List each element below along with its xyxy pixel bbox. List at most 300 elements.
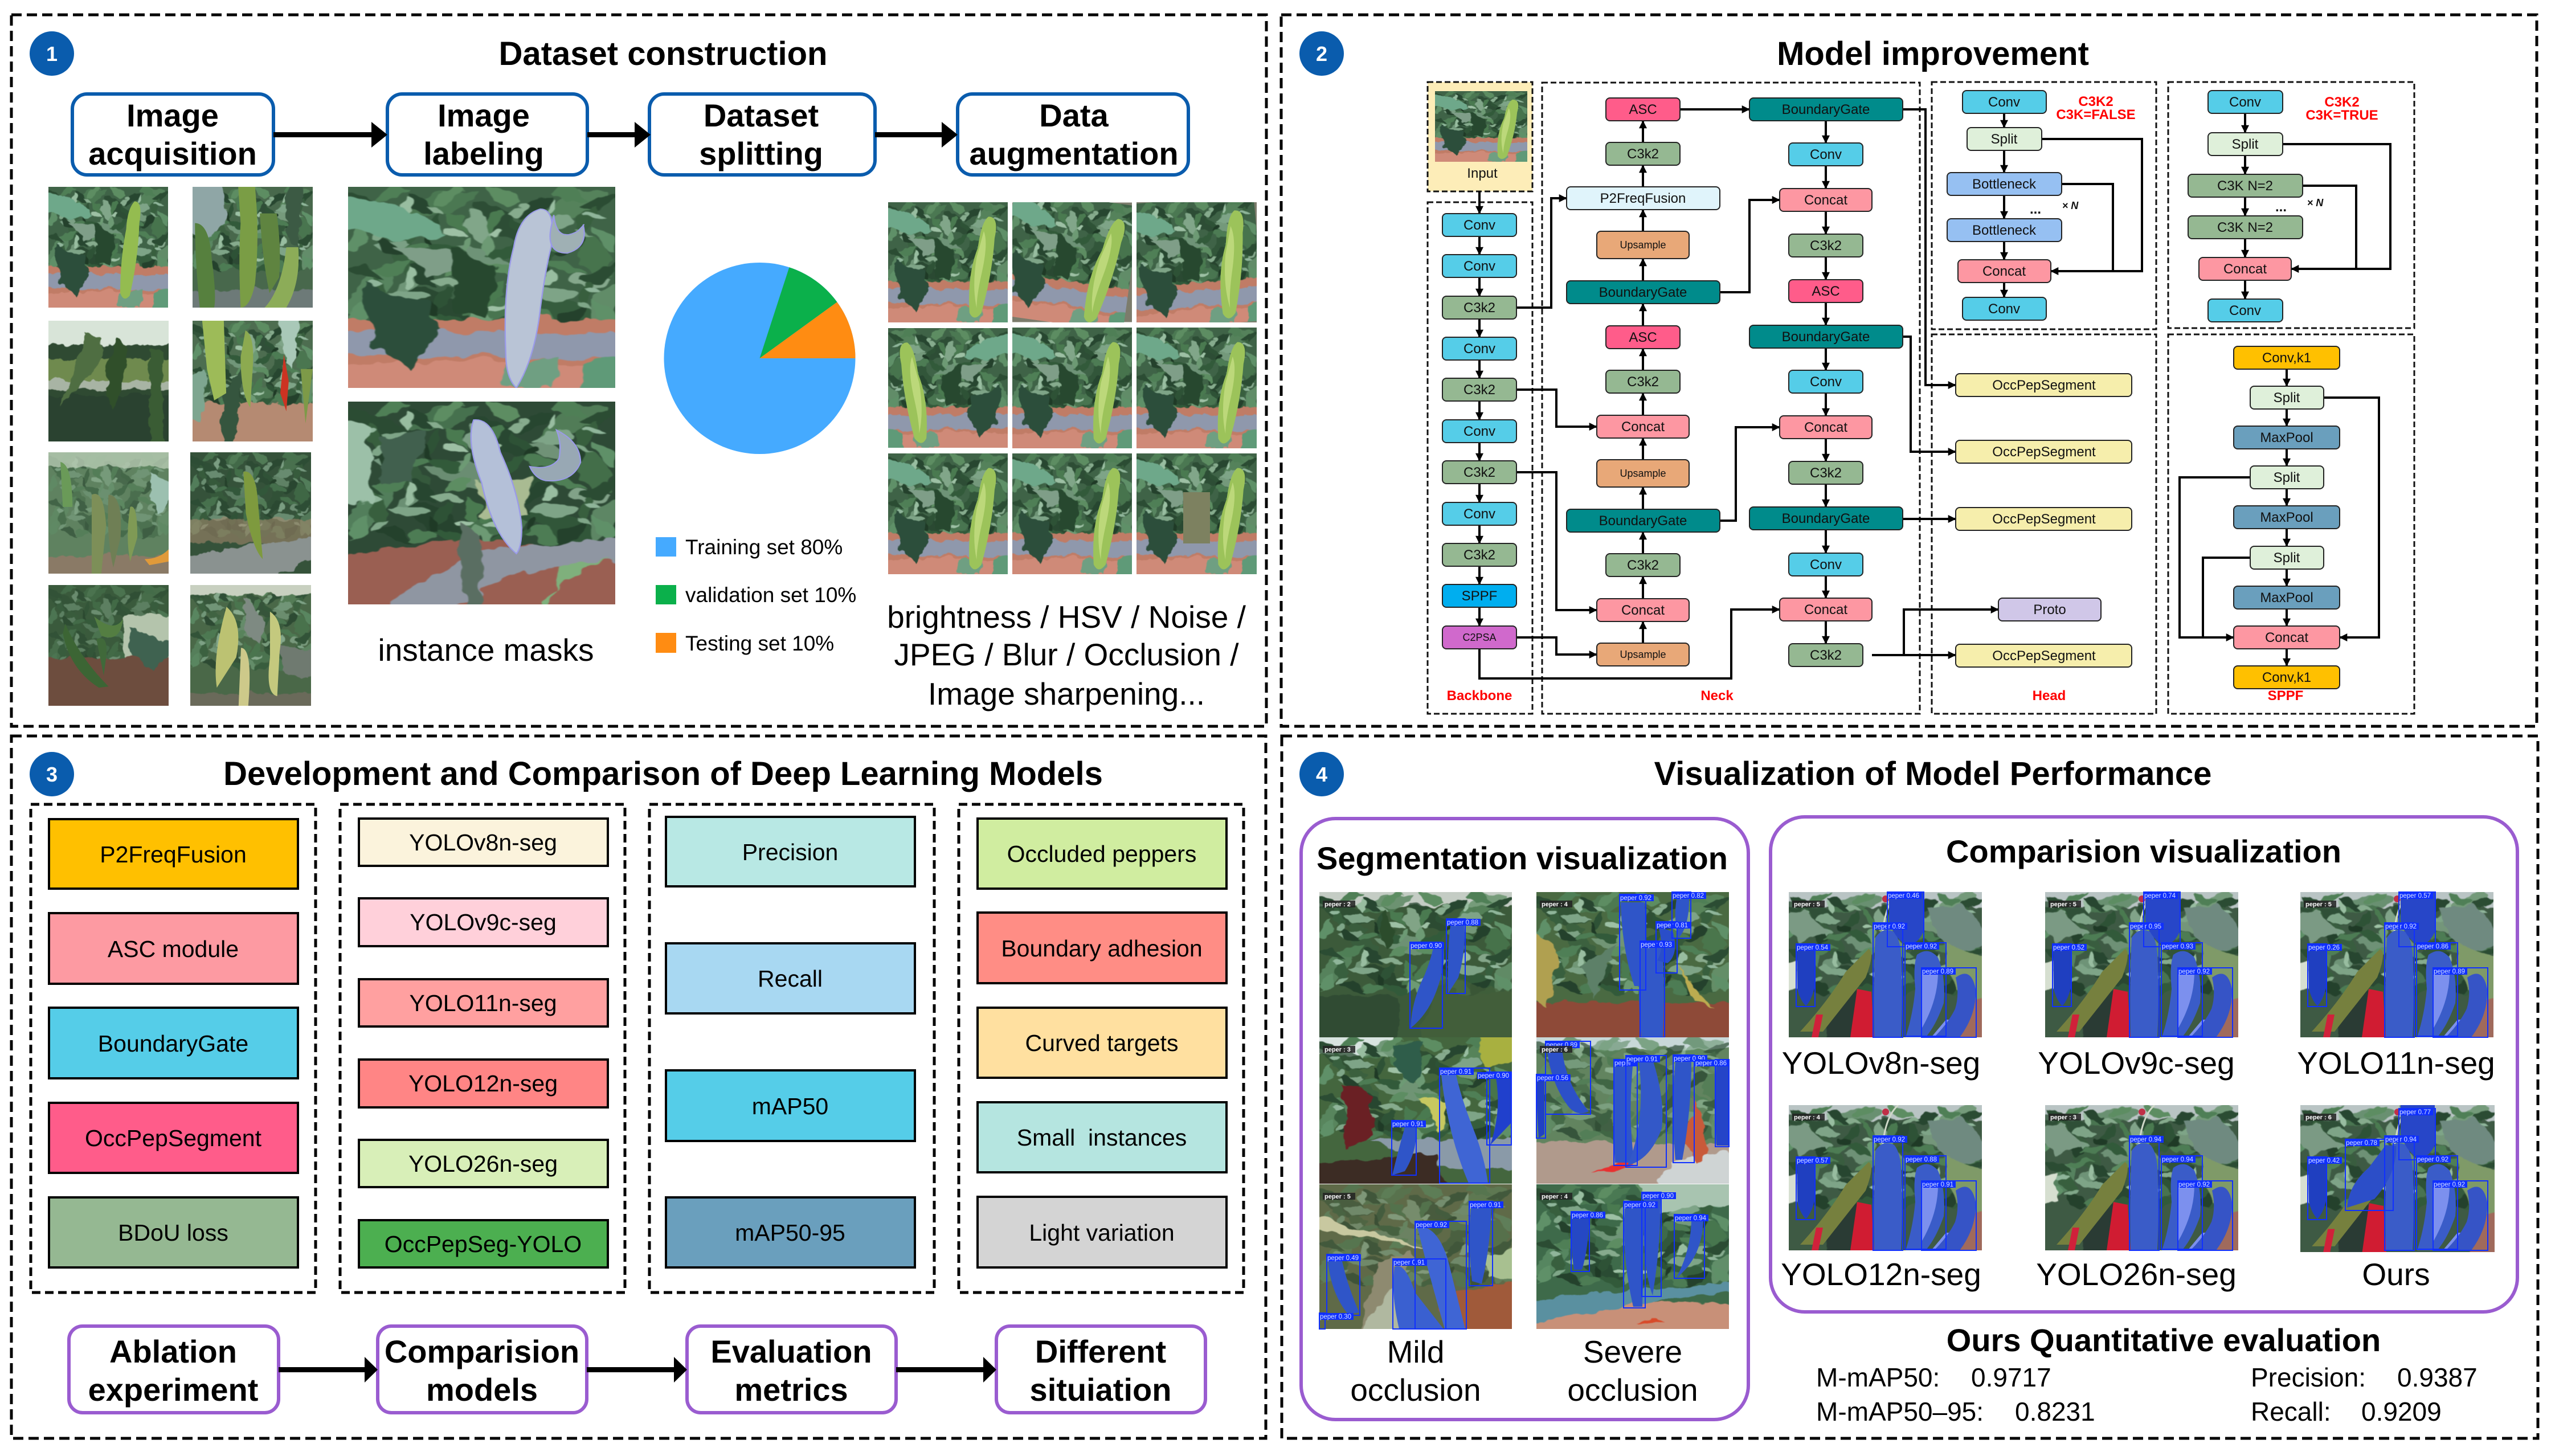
C3k2 block (1442, 296, 1516, 319)
flow box: evaluation metrics: metrics (734, 1372, 848, 1408)
flow box: data augmentation: Data (1039, 97, 1109, 133)
heading: model improvement: Model improvement (1777, 35, 2089, 72)
Concat block (1958, 260, 2051, 283)
photo grid: data augmentation (876, 175, 1278, 586)
comparison image: YOLO12n-seg (1772, 1088, 2000, 1270)
panel border (11, 736, 1266, 1438)
augmentation 4 (888, 328, 1008, 448)
Concat block: Concat (2265, 630, 2308, 645)
legend: split ratios (656, 535, 856, 655)
head blocks (1956, 374, 2132, 667)
flow box: image labeling: Image (438, 97, 530, 133)
comparison image: YOLOv9c-seg: peper 0.74 (2144, 893, 2176, 899)
Conv,k1 block (2234, 346, 2340, 369)
Concat block: Concat (1621, 603, 1665, 618)
repeat mark: × N (2307, 197, 2324, 208)
neck column 1 blocks (1567, 98, 1720, 666)
flow box: image labeling (387, 94, 587, 175)
comparison image: YOLOv8n-seg: peper : 5 (1794, 901, 1820, 908)
arrow: evaluation to situiation (896, 1357, 996, 1383)
Concat block: Concat (1804, 602, 1847, 617)
panel border (1281, 15, 2537, 726)
model: YOLO12n-seg: YOLO12n-seg (408, 1070, 558, 1097)
comparison image: YOLO11n-seg: peper 0.26 (2308, 944, 2340, 951)
metric: M-mAP50-95: 0.8231 (2015, 1397, 2095, 1426)
panel: visualization of model performance (1282, 736, 2538, 1438)
caption: YOLOv9c-seg: YOLOv9c-seg (2038, 1045, 2235, 1081)
comparison image: YOLO11n-seg: peper : 5 (2305, 901, 2332, 908)
flow box: different situiation: Different (1035, 1334, 1166, 1369)
model: YOLOv8n-seg (359, 819, 608, 866)
comparison image: YOLOv9c-seg: peper 0.52 (2053, 944, 2084, 951)
detection image: severe 1: peper 0.81 (1657, 922, 1688, 929)
repeat mark: ... (2030, 202, 2041, 217)
Conv block (1963, 91, 2046, 113)
ASC block (1789, 280, 1863, 302)
label: C3K2 true (2305, 95, 2378, 123)
comparison image: YOLO12n-seg: peper 0.92 (1874, 1136, 1905, 1143)
comparison image: Ours: peper 0.78 (2346, 1140, 2377, 1147)
augmentation 2 (1012, 202, 1132, 322)
flow box: dataset splitting: splitting (699, 136, 823, 171)
C3K2 false dashed group (1932, 82, 2156, 329)
flow box: ablation experiment (69, 1326, 279, 1413)
C3k2 block: C3k2 (1463, 382, 1495, 398)
Split block (2250, 466, 2324, 489)
Conv block (2208, 299, 2283, 322)
detection image: severe 2: peper : 6 (1542, 1046, 1568, 1053)
situation: occluded peppers (978, 819, 1227, 889)
caption: augmentation methods: JPEG / Blur / Occlusion / (894, 637, 1239, 672)
detection image: severe 3: peper : 4 (1542, 1193, 1568, 1200)
comparison image: Ours: peper : 6 (2305, 1114, 2332, 1121)
comparison image: YOLO11n-seg: peper 0.89 (2434, 968, 2465, 975)
detection image: severe 3 (1517, 1170, 1748, 1343)
detection image: severe 3: peper 0.86 (1572, 1212, 1603, 1219)
caption: Ours: Ours (2362, 1257, 2430, 1292)
Upsample block (1597, 231, 1689, 259)
Conv block (1789, 553, 1863, 576)
Split block: Split (2274, 470, 2300, 485)
ASC block (1606, 326, 1680, 349)
BoundaryGate block: BoundaryGate (1782, 102, 1870, 117)
head dashed group (1932, 334, 2156, 714)
flow box: comparision models (378, 1326, 587, 1413)
module: BDoU loss: BDoU loss (118, 1220, 228, 1246)
caption: mild occlusion (1350, 1334, 1481, 1408)
Conv block: Conv (1810, 147, 1842, 162)
label: C3K2 false (2056, 94, 2136, 122)
comparison image: YOLO12n-seg: peper 0.88 (1906, 1156, 1937, 1163)
panel: development and comparison (11, 736, 1266, 1438)
augmentation 9 with occlusion (1125, 441, 1269, 586)
MaxPool block: MaxPool (2260, 590, 2313, 606)
flow box: comparision models: models (426, 1372, 538, 1408)
comparison image: YOLO26n-seg: peper : 3 (2050, 1114, 2076, 1121)
arrow: comparision to evaluation (587, 1357, 687, 1383)
backbone blocks (1442, 214, 1516, 649)
C3k2 block (1606, 554, 1680, 576)
caption: YOLO26n-seg: YOLO26n-seg (2036, 1257, 2237, 1292)
number badge 1: 1 (46, 42, 58, 66)
arrows: C3K2 false (2004, 113, 2142, 297)
SPPF block (1442, 584, 1516, 607)
metric: mAP50-95 (666, 1197, 915, 1267)
caption: augmentation methods (887, 599, 1246, 711)
number badge 2: 2 (1316, 42, 1327, 66)
augmentation 1 (876, 190, 1020, 334)
sub-panel: segmentation visualization (1300, 819, 1748, 1420)
Conv block (1789, 370, 1863, 393)
C3k2 block: C3k2 (1810, 648, 1842, 663)
arrows: C3K2 true (2245, 113, 2390, 299)
model: YOLOv9c-seg (359, 898, 608, 946)
comparison image: YOLOv8n-seg: peper 0.54 (1797, 944, 1829, 951)
labeled photo with masks, top (348, 187, 615, 388)
augmentation 3 (1136, 202, 1257, 322)
photo 5 (36, 440, 181, 586)
head label: Head (2033, 688, 2066, 704)
Concat block: Concat (2223, 261, 2267, 277)
flow box: different situiation: situiation (1030, 1372, 1171, 1408)
detection image: severe 1: peper : 4 (1542, 901, 1568, 908)
Concat block (1597, 599, 1689, 621)
model: OccPepSeg-YOLO (359, 1220, 608, 1267)
flow box: dataset splitting (649, 94, 875, 175)
detection image: mild 1: peper : 2 (1324, 901, 1351, 908)
group: comparison models (340, 804, 625, 1293)
comparison image: YOLO26n-seg: peper 0.92 (2178, 1181, 2210, 1188)
situation: small instances (978, 1102, 1227, 1172)
detection image: severe 1: peper 0.92 (1620, 895, 1651, 902)
metric: Precision: 0.9387 (2397, 1363, 2478, 1392)
C3k2 block (1789, 234, 1863, 257)
metric: mAP50: mAP50 (752, 1093, 828, 1119)
Split block (2250, 546, 2324, 569)
BoundaryGate block (1749, 98, 1903, 121)
detection image: mild 2: peper 0.91 (1440, 1069, 1471, 1075)
flow box: image acquisition: Image (126, 97, 219, 133)
ASC block: ASC (1629, 330, 1657, 345)
arrow: labeling to splitting (587, 122, 651, 148)
legend: split ratios: validation set 10% (685, 583, 856, 607)
number badge 3 (30, 752, 74, 796)
module: ASC (49, 913, 298, 984)
Concat block: Concat (1804, 420, 1847, 435)
BoundaryGate block: BoundaryGate (1599, 285, 1687, 300)
Split block: Split (2232, 137, 2259, 152)
C3k2 block (1606, 370, 1680, 393)
Conv block: Conv (2229, 303, 2261, 318)
comparison image: YOLOv9c-seg: peper 0.93 (2162, 943, 2193, 950)
detection image: mild 3: peper 0.91 (1470, 1202, 1501, 1209)
MaxPool block (2234, 506, 2340, 529)
comparison image: Ours (2283, 1088, 2512, 1272)
module: BDoU loss (49, 1197, 298, 1267)
caption: mild occlusion: occlusion (1350, 1372, 1481, 1408)
photo 7 (36, 573, 181, 718)
model: YOLOv9c-seg: YOLOv9c-seg (410, 909, 557, 935)
situation: curved targets (978, 1008, 1227, 1078)
C3k2 block (1442, 378, 1516, 401)
legend: split ratios: Testing set 10% (685, 632, 834, 655)
comparison image: Ours: peper 0.77 (2399, 1109, 2431, 1116)
label: SPPF: SPPF (2268, 688, 2303, 704)
module: P2FreqFusion (49, 819, 298, 889)
C3K block: C3K N=2 (2217, 178, 2273, 194)
detection image: mild 2: peper 0.91 (1392, 1121, 1424, 1128)
repeat mark (2030, 200, 2079, 217)
Conv block: Conv (1463, 341, 1495, 357)
comparison image: YOLO12n-seg: peper : 4 (1794, 1114, 1821, 1121)
flow box: data augmentation: augmentation (969, 136, 1179, 171)
comparison image: YOLOv9c-seg: peper : 5 (2050, 901, 2076, 908)
detection image: severe 1: peper 0.93 (1641, 942, 1672, 948)
metric: Recall: Recall: (2251, 1397, 2331, 1426)
Concat block (1780, 189, 1872, 211)
number badge 4: 4 (1316, 763, 1327, 786)
Bottleneck block (1947, 173, 2062, 195)
OccPepSegment block (1956, 508, 2132, 530)
detection image: severe 2: peper 0.56 (1537, 1075, 1568, 1082)
Conv block (2208, 91, 2283, 113)
photo 6 (178, 440, 323, 586)
situation: light variation (978, 1197, 1227, 1267)
Conv block: Conv (1463, 218, 1495, 233)
flow box: different situiation (996, 1326, 1205, 1413)
BoundaryGate block (1567, 509, 1720, 532)
neck dashed group (1542, 83, 1920, 714)
detection image: mild 3: peper 0.30 (1320, 1314, 1351, 1320)
input block: Input (1467, 166, 1498, 181)
module: BoundaryGate (49, 1008, 298, 1078)
Split block: Split (2274, 390, 2300, 406)
detection image: mild 3 (1300, 1170, 1531, 1343)
metric: mAP50 (666, 1070, 915, 1141)
metric: Precision (2251, 1363, 2478, 1392)
detection image: severe 1 (1517, 877, 1748, 1052)
C3K block (2188, 216, 2303, 239)
Split block: Split (1991, 132, 2018, 147)
ASC block: ASC (1629, 102, 1657, 117)
comparison image: Ours: peper 0.94 (2385, 1136, 2417, 1143)
heading: quantitative evaluation: Ours Quantitative evaluation (1947, 1322, 2381, 1358)
heading: development and comparison: Development and Comparison of Deep Learning Models (223, 755, 1103, 792)
comparison image: YOLO11n-seg: peper 0.57 (2399, 893, 2431, 899)
Conv block (1442, 502, 1516, 525)
number badge 4 (1299, 752, 1344, 796)
metric: Precision (666, 817, 915, 886)
comparison image: YOLO26n-seg: peper 0.94 (2162, 1156, 2194, 1163)
label: C3K2 false: C3K2 (2078, 94, 2113, 109)
module: OccPepSegment (49, 1103, 298, 1173)
detection image: severe 2 (1517, 1023, 1748, 1199)
photo 3 (36, 309, 181, 453)
flow box: ablation experiment: Ablation (109, 1334, 237, 1369)
SPPF block: SPPF (1462, 588, 1497, 604)
backbone label: Backbone (1447, 688, 1512, 704)
Conv,k1 block (2234, 666, 2340, 689)
P2FreqFusion block: P2FreqFusion (1600, 191, 1686, 206)
photo 8 (178, 573, 323, 718)
comparison image: Ours: peper 0.92 (2417, 1156, 2448, 1163)
comparison image: YOLOv8n-seg: peper 0.89 (1922, 968, 1953, 975)
detection image: mild 1: peper 0.88 (1447, 919, 1478, 926)
situation: light variation: Light variation (1029, 1220, 1175, 1246)
Bottleneck block (1947, 219, 2062, 242)
flow box: dataset splitting: Dataset (704, 97, 819, 133)
neck column 2 blocks (1749, 98, 1903, 666)
comparison image: YOLO11n-seg: peper 0.86 (2417, 943, 2448, 950)
arrow: acquisition to labeling (273, 122, 387, 148)
model: OccPepSeg-YOLO: OccPepSeg-YOLO (385, 1231, 582, 1257)
metric: M-mAP50: 0.9717 (1971, 1363, 2051, 1392)
detection image: mild 2: peper 0.90 (1478, 1073, 1509, 1079)
Conv block: Conv (1463, 259, 1495, 274)
Conv block: Conv (1810, 557, 1842, 572)
Conv block: Conv (2229, 95, 2261, 110)
C3k2 block: C3k2 (1463, 300, 1495, 316)
Concat block (2234, 626, 2340, 649)
Concat block (2199, 257, 2291, 280)
detection image: mild 2 (1300, 1023, 1531, 1199)
C3k2 block (1442, 543, 1516, 566)
comparison image: YOLOv8n-seg: peper 0.92 (1906, 943, 1937, 950)
arrows: SPPF (2180, 369, 2379, 666)
Upsample block: Upsample (1620, 468, 1666, 479)
OccPepSegment block: OccPepSegment (1992, 444, 2096, 460)
label: C3K2 true: C3K=TRUE (2305, 108, 2378, 123)
arrow: splitting to augmentation (875, 122, 958, 148)
SPPF module (2180, 346, 2379, 704)
comparison image: Ours: peper 0.42 (2308, 1158, 2340, 1164)
C3K block: C3K N=2 (2217, 220, 2273, 235)
flow box: ablation experiment: experiment (88, 1372, 258, 1408)
detection image: mild 3: peper 0.49 (1327, 1255, 1359, 1262)
photo 1 (36, 175, 180, 320)
number badge 3: 3 (46, 763, 58, 786)
module: P2FreqFusion: P2FreqFusion (100, 841, 247, 868)
Conv block: Conv (1810, 374, 1842, 390)
C3k2 block: C3k2 (1627, 146, 1659, 162)
photo 2 (181, 175, 325, 320)
metric: M-mAP50 (1816, 1363, 2051, 1392)
Upsample block (1597, 643, 1689, 666)
flow box: comparision models: Comparision (385, 1334, 579, 1369)
Concat block (1780, 416, 1872, 439)
flow box: image acquisition: acquisition (88, 136, 257, 171)
Conv block: Conv (1463, 506, 1495, 522)
metric: Recall: Recall (758, 966, 823, 992)
comparison image: YOLO26n-seg: peper 0.94 (2130, 1136, 2162, 1143)
Concat block: Concat (1982, 264, 2026, 279)
Upsample block (1597, 460, 1689, 487)
caption: augmentation methods: brightness / HSV / Noise / (887, 599, 1246, 635)
Proto block: Proto (2033, 602, 2066, 617)
caption: severe occlusion: Severe (1583, 1334, 1682, 1369)
C3k2 block: C3k2 (1627, 374, 1659, 390)
detection image: severe 3: peper 0.94 (1675, 1215, 1707, 1222)
caption: YOLO11n-seg: YOLO11n-seg (2297, 1045, 2495, 1081)
metric: M-mAP50-95: M-mAP50–95: (1816, 1397, 1984, 1426)
repeat mark (2275, 197, 2324, 215)
detection image: mild 1 (1300, 877, 1531, 1052)
situation: boundary adhesion: Boundary adhesion (1001, 935, 1203, 962)
augmentation 6 (1125, 316, 1269, 460)
C3k2 block: C3k2 (1463, 465, 1495, 480)
OccPepSegment block (1956, 374, 2132, 396)
detection image: severe 2: peper (1614, 1060, 1632, 1067)
C3k2 block: C3k2 (1627, 558, 1659, 573)
C3k2 block: C3k2 (1463, 547, 1495, 563)
group: improvement modules (31, 804, 316, 1293)
pie chart: dataset split (664, 263, 856, 454)
heading: visualization: Visualization of Model Performance (1654, 755, 2211, 792)
model: YOLOv8n-seg: YOLOv8n-seg (409, 829, 557, 856)
C3K2 true dashed group (2168, 82, 2414, 328)
legend: split ratios: Training set 80% (685, 535, 843, 559)
C3k2 block (1789, 644, 1863, 666)
detection image: mild 3: peper 0.91 (1393, 1259, 1425, 1266)
group: evaluation metrics (649, 804, 934, 1293)
arrow: ablation to comparision (279, 1357, 378, 1383)
C2PSA block (1442, 626, 1516, 649)
MaxPool block (2234, 586, 2340, 609)
caption: instance masks: instance masks (378, 632, 594, 668)
C3K2 true module (2188, 91, 2390, 322)
Split block (1967, 128, 2042, 150)
Conv block: Conv (1988, 95, 2020, 110)
Conv block (1442, 214, 1516, 236)
comparison image: YOLO26n-seg (2028, 1088, 2256, 1270)
BoundaryGate block (1749, 325, 1903, 348)
augmentation 5 (1000, 316, 1144, 460)
C3K block (2188, 174, 2303, 197)
comparison image: YOLO12n-seg: peper 0.57 (1797, 1158, 1828, 1164)
panel border (1282, 736, 2538, 1438)
metric: Recall (2251, 1397, 2442, 1426)
Upsample block: Upsample (1620, 649, 1666, 660)
BoundaryGate block: BoundaryGate (1782, 511, 1870, 526)
Split block (2208, 133, 2283, 156)
ASC block (1606, 98, 1680, 121)
photo 4 (181, 309, 325, 453)
detection image: severe 3: peper 0.92 (1624, 1202, 1655, 1209)
Split block (2250, 386, 2324, 409)
metric: M-mAP50: M-mAP50: (1816, 1363, 1940, 1392)
Concat block: Concat (1804, 193, 1847, 208)
panel: dataset construction (11, 15, 1278, 726)
comparison image: YOLOv8n-seg: peper 0.92 (1874, 923, 1905, 930)
heading: dataset construction: Dataset construction (499, 35, 827, 72)
neck label: Neck (1700, 688, 1734, 704)
augmentation 8 (1000, 441, 1144, 586)
C3k2 block: C3k2 (1810, 238, 1842, 253)
BoundaryGate block (1567, 281, 1720, 304)
detection image: mild 3: peper : 5 (1324, 1193, 1351, 1200)
number badge 1 (30, 31, 74, 76)
detection image: severe 1: peper 0.82 (1673, 893, 1704, 899)
caption: YOLO12n-seg: YOLO12n-seg (1781, 1257, 1981, 1292)
detection image: mild 3: peper 0.92 (1416, 1222, 1447, 1229)
Split block: Split (2274, 550, 2300, 566)
module: ASC: ASC module (108, 936, 239, 962)
C3k2 block (1606, 142, 1680, 165)
C3k2 block (1789, 461, 1863, 484)
comparison image: YOLOv9c-seg (2028, 875, 2256, 1057)
repeat mark: ... (2275, 199, 2287, 215)
metric: Recall (666, 943, 915, 1013)
